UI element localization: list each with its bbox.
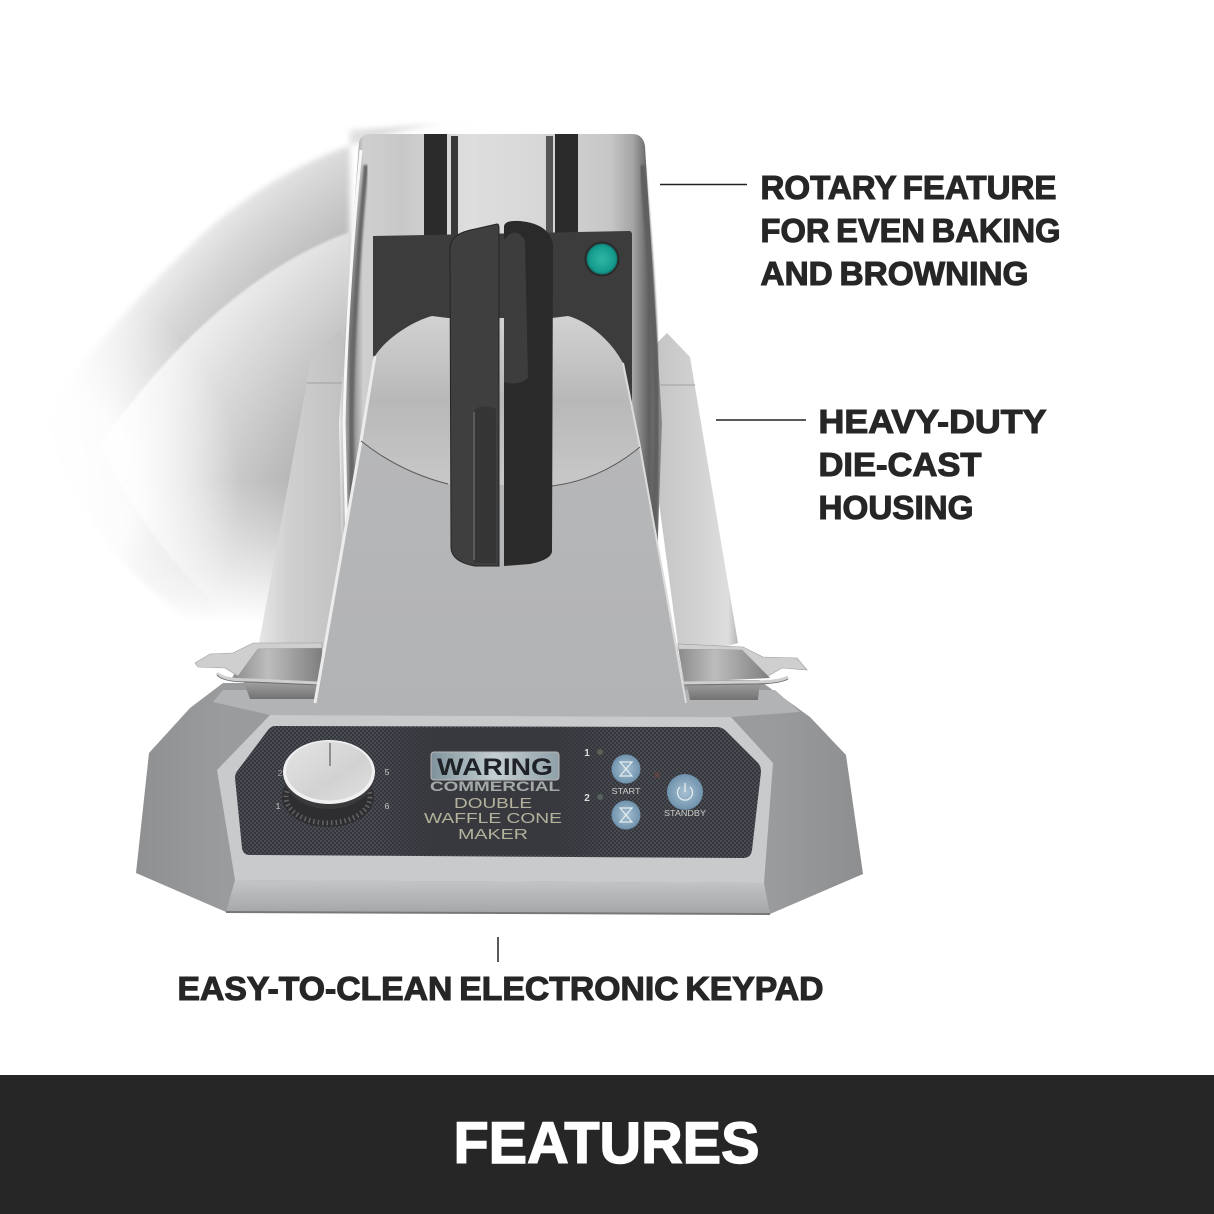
footer title: FEATURES [454,1111,760,1176]
callout leader: rotary [660,184,747,186]
waring logo: WARING [437,754,553,781]
base [136,683,863,914]
right batter tray [678,644,807,700]
motion blur swoosh [0,122,474,700]
standby button [667,774,703,810]
callout leader: keypad [497,937,499,962]
start label: START [612,786,640,796]
housing side right [640,333,738,660]
start button two [612,800,640,830]
callout: die-cast housing: DIE-CAST [818,447,982,484]
control panel [235,726,761,858]
start indicators: 2 [584,793,590,804]
housing side left [259,331,360,660]
ready indicator light [586,242,618,276]
start button one [612,754,640,784]
standby label: STANDBY [664,808,706,818]
callout: rotary feature: FOR EVEN BAKING [760,213,1060,250]
callout: rotary feature: AND BROWNING [760,256,1028,293]
dial numbers: 5 [385,767,390,777]
model name: WAFFLE CONE [424,810,562,827]
model name: DOUBLE [454,795,532,812]
dark control plate [373,231,632,402]
right handle [504,221,553,566]
model name [424,795,562,843]
callout leader: housing [716,419,806,421]
start indicators: 1 [584,748,590,759]
front stand [313,356,688,705]
dial numbers [276,767,390,811]
rotating top housing [339,134,662,600]
dial numbers: 1 [276,801,281,811]
dial numbers: 6 [385,801,390,811]
upper stand arch [361,316,640,486]
footer band [0,1075,1214,1214]
callout: die-cast housing: HEAVY-DUTY [818,404,1046,441]
temperature knob [282,740,375,827]
callout: keypad: EASY-TO-CLEAN ELECTRONIC KEYPAD [178,971,824,1008]
housing slots [424,134,578,238]
waring logo [430,752,561,794]
start indicators [584,748,660,804]
dial numbers: 2 [278,768,283,778]
callout: die-cast housing [818,404,1046,527]
callout: rotary feature: ROTARY FEATURE [760,170,1056,207]
callout: rotary feature [760,170,1060,293]
panel center dark band [370,728,620,855]
model name: MAKER [458,826,528,843]
waring logo: COMMERCIAL [430,778,561,794]
left batter tray [195,643,322,699]
callout: die-cast housing: HOUSING [818,490,974,527]
left handle [450,224,499,566]
